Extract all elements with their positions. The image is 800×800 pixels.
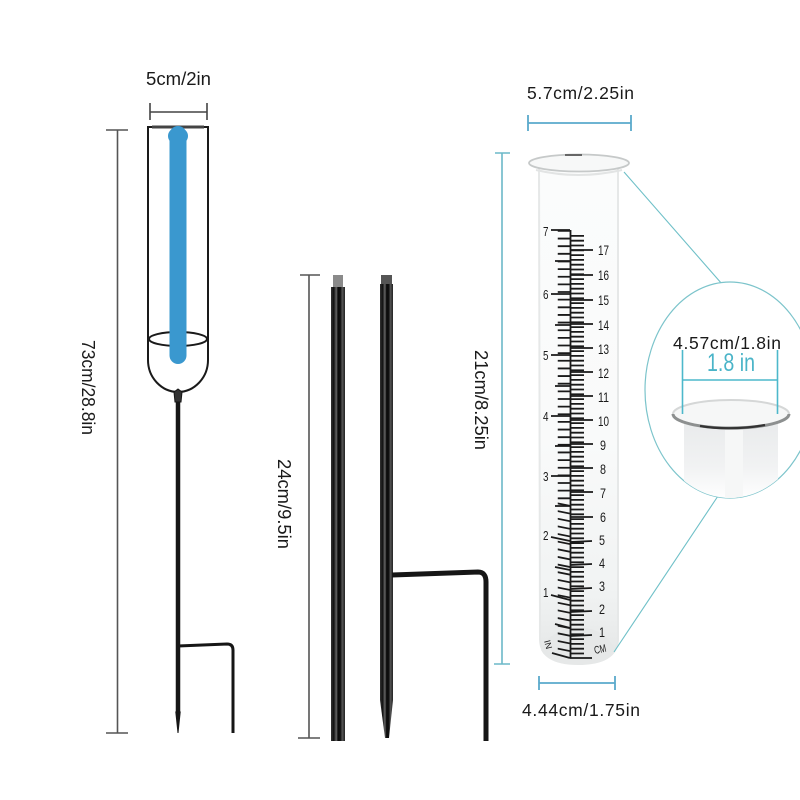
panel: extension poles [274,275,486,741]
scale: inch numbers: 4 [543,409,548,424]
dimension: bottom diameter [539,676,615,690]
icon: magnified tube rim [673,400,789,500]
scale: centimetre numbers: 5 [599,532,605,548]
scale: centimetre numbers [593,242,609,657]
scale: inch numbers: 2 [543,528,548,543]
scale: centimetre numbers: 17 [598,242,609,258]
scale: centimetre numbers: CM [593,643,607,657]
scale: inch numbers [542,224,554,650]
label: top diameter 5.7cm/2.25in: 5.7cm/2.25in [527,83,634,103]
scale: inch numbers: 1 [543,585,548,600]
scale: centimetre numbers: 4 [599,555,605,571]
scale: centimetre numbers: 1 [599,624,605,640]
icon: blue tube [168,126,188,364]
scale: inch numbers: IN [542,639,554,650]
icon: glass holder outline [148,127,208,392]
dimension: top diameter [528,115,631,131]
dimension: top width [150,103,207,120]
scale: inch numbers: 3 [543,469,548,484]
label: top width 5cm/2in: 5cm/2in [146,69,211,89]
panel: inner diameter callout [614,172,800,652]
scale: centimetre numbers: 14 [598,317,609,333]
label: pole height 24cm/9.5in: 24cm/9.5in [274,459,294,549]
callout circle [645,282,800,498]
scale: centimetre numbers: 9 [600,437,606,453]
icon: stake pole with prong [380,275,486,741]
scale: centimetre numbers: 12 [598,365,609,381]
scale: inch numbers: 7 [543,224,548,239]
dimension: tube height [494,153,510,664]
icon: glass tube [529,154,629,664]
icon: stake with prong [174,389,233,733]
label: tube height 21cm/8.25in: 21cm/8.25in [471,350,491,450]
label: total height 73cm/28.8in: 73cm/28.8in [78,340,98,435]
scale: centimetre numbers: 7 [600,485,606,501]
dimension: rim diameter [682,350,778,414]
scale: inch numbers: 5 [543,348,548,363]
scale: inch numbers: 6 [543,287,548,302]
label: blue 1.8 in: 1.8 in [707,349,755,377]
panel: assembled gauge with stake [78,69,233,733]
scale: centimetre numbers: 2 [599,601,605,617]
scale: centimetre numbers: 11 [598,389,609,405]
scale: centimetre numbers: 16 [598,267,609,283]
scale: inch and centimetre ticks [551,230,593,658]
callout connector lines [614,172,722,652]
scale: centimetre numbers: 13 [598,341,609,357]
scale: centimetre numbers: 6 [600,509,606,525]
icon: straight pole [331,275,345,741]
scale: centimetre numbers: 15 [598,292,609,308]
label: rim diameter 4.57cm/1.8in: 4.57cm/1.8in [673,333,781,353]
scale: centimetre numbers: 10 [598,413,609,429]
label: bottom diameter 4.44cm/1.75in: 4.44cm/1.75in [522,700,640,720]
dimension: pole height [298,275,320,738]
panel: rain gauge tube [471,83,640,720]
scale: centimetre numbers: 3 [599,578,605,594]
scale: centimetre numbers: 8 [600,461,606,477]
dimension: total height [106,130,128,733]
